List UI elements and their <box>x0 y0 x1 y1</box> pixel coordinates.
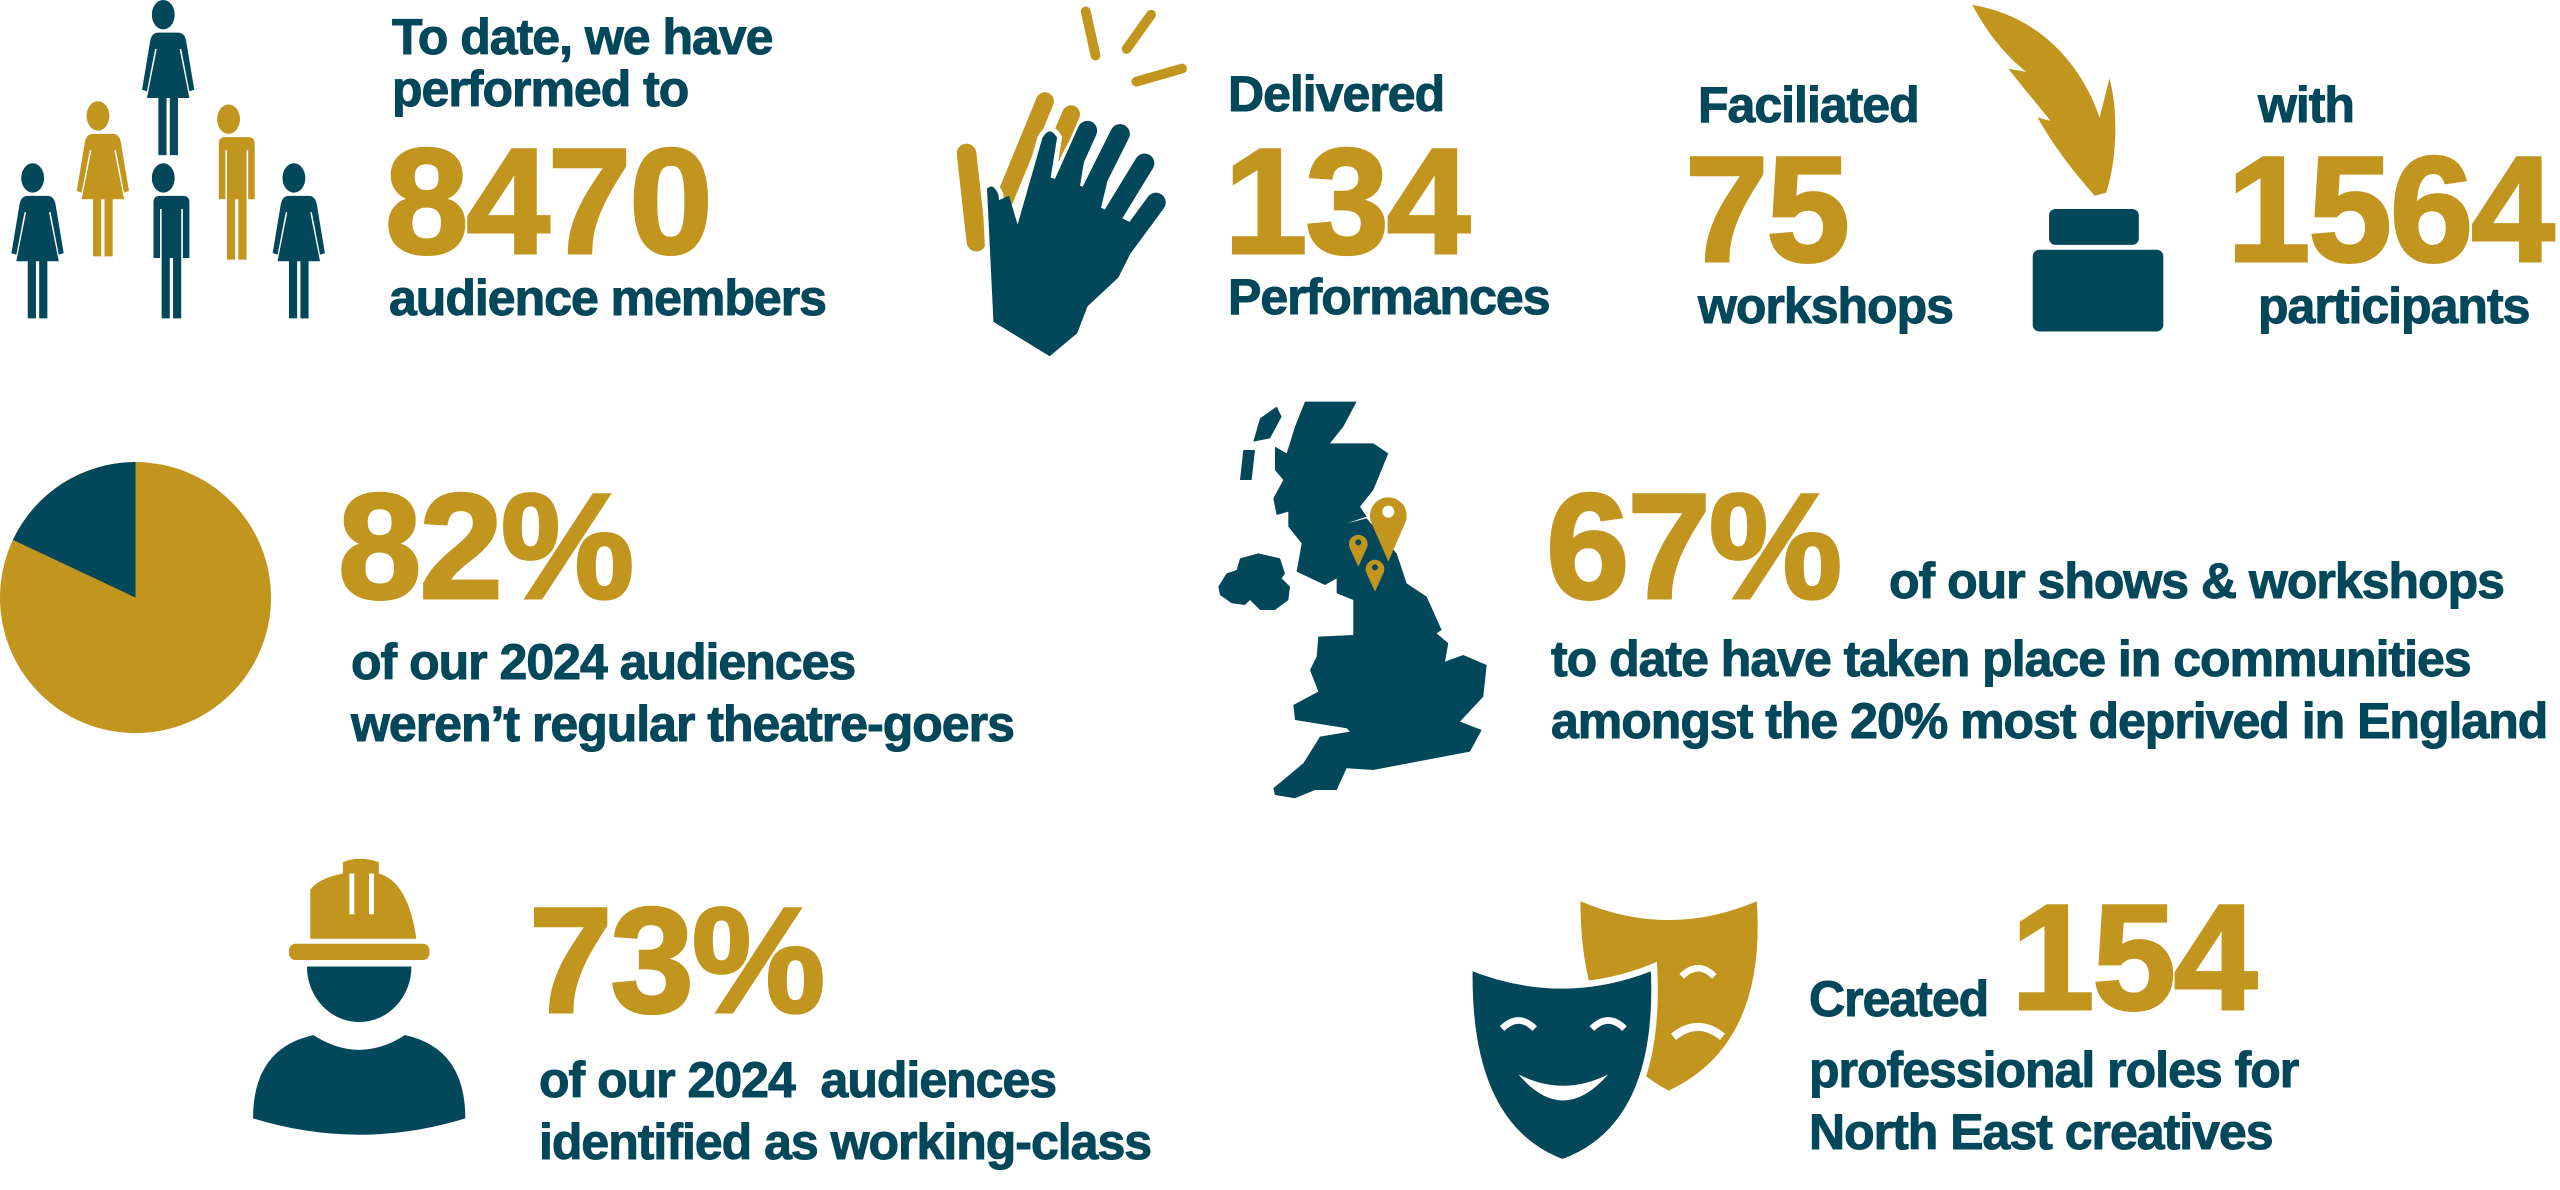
stat: 1564: 1564 <box>2227 125 2553 293</box>
stat: 154: 154 <box>2011 873 2255 1041</box>
text: audience intro: To date, we have <box>392 9 772 65</box>
text: performed to: performed to <box>392 61 688 117</box>
text: Delivered: Delivered <box>1228 66 1444 122</box>
icon: quill and ink pot <box>1972 5 2163 331</box>
text: Performances: Performances <box>1228 269 1550 325</box>
text: roles description: professional roles for North East creatives <box>1809 1042 2298 1160</box>
text: 67% description: to date have taken place in communities amongst the 20% most deprived in England <box>1551 631 2547 749</box>
icon: UK map with pins <box>1218 402 1487 798</box>
stat: 73%: 73% <box>529 876 823 1044</box>
text: with: with <box>2258 77 2354 133</box>
stat: 67%: 67% <box>1546 462 1840 630</box>
text: 82% description: of our 2024 audiences weren’t regular theatre-goers <box>351 634 1014 752</box>
stat: 8470: 8470 <box>385 117 711 285</box>
text: Created: Created <box>1809 971 1988 1027</box>
stat: 75: 75 <box>1685 125 1848 293</box>
icon: audience people group <box>11 0 325 318</box>
stat: 134: 134 <box>1224 117 1468 285</box>
icon: theatre masks <box>1469 901 1758 1162</box>
icon: pie chart 82% <box>0 462 271 733</box>
text: participants: participants <box>2258 278 2529 334</box>
text: workshops: workshops <box>1698 278 1953 334</box>
text: audience members: audience members <box>389 270 826 326</box>
icon: clapping hands <box>967 11 1182 359</box>
stat: 82%: 82% <box>338 462 632 630</box>
text: 67% description line 1: of our shows & workshops <box>1889 553 2504 609</box>
text: Faciliated: Faciliated <box>1698 77 1919 133</box>
icon: construction worker <box>253 859 465 1135</box>
text: 73% description: of our 2024 audiences identified as working-class <box>539 1052 1151 1170</box>
